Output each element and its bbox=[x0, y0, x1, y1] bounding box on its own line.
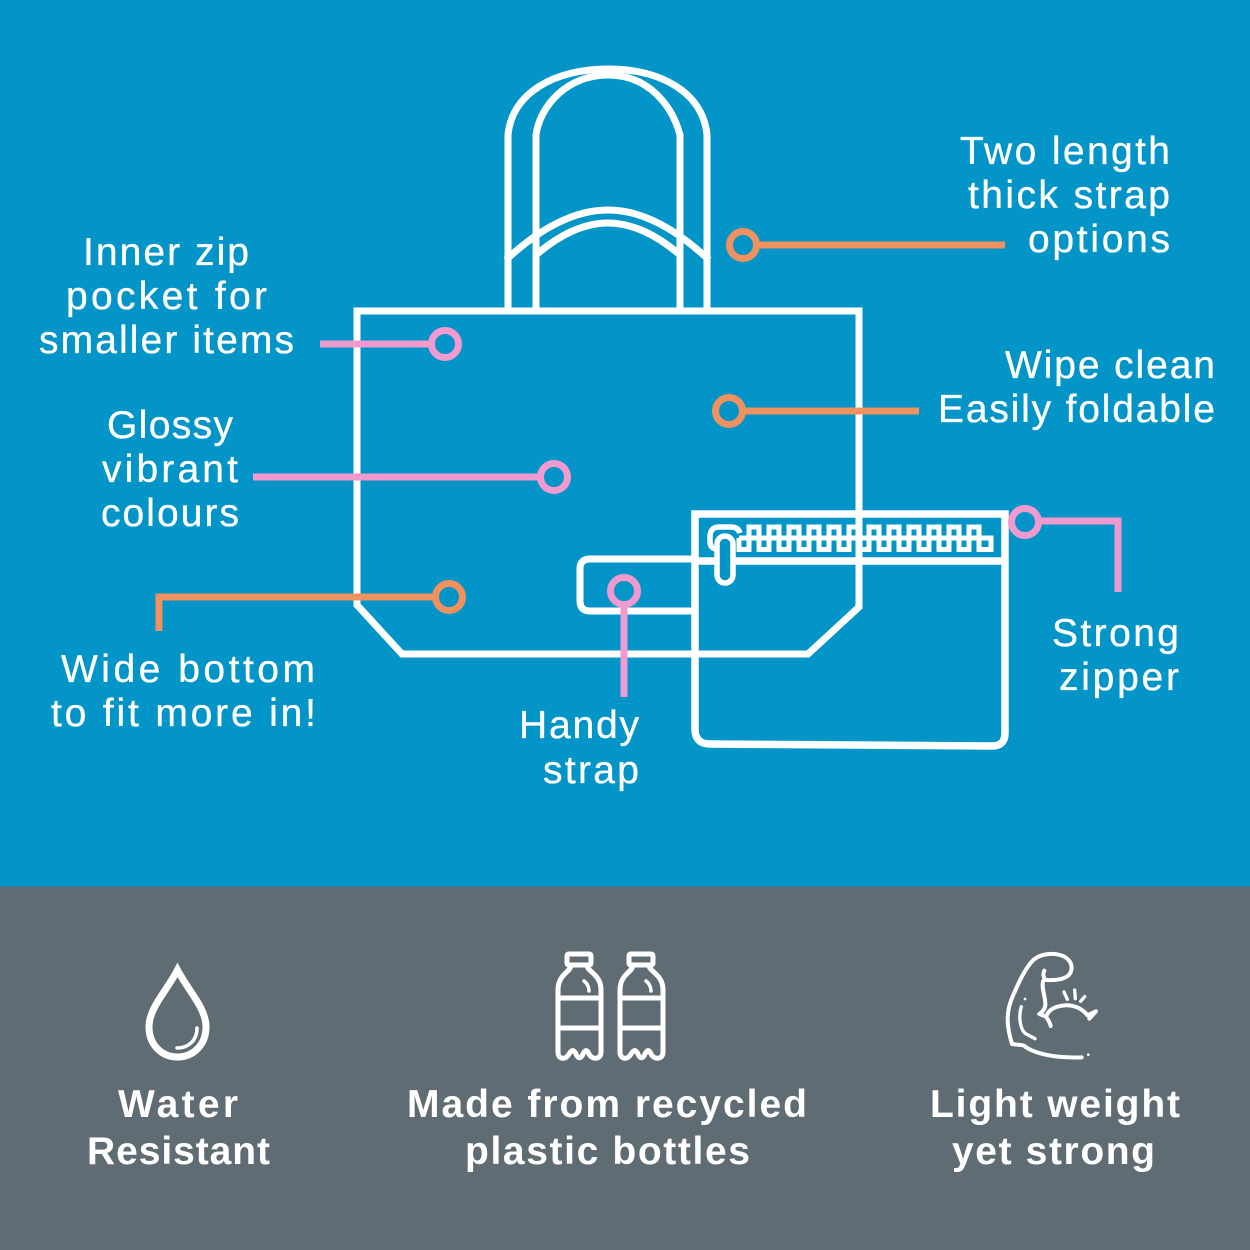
label: inner zip pocket: Inner zip bbox=[83, 231, 249, 274]
icon: water drop bbox=[149, 970, 206, 1057]
label: strong zipper bbox=[1052, 612, 1179, 699]
bag body bbox=[357, 311, 859, 654]
label: water resistant bbox=[87, 1083, 270, 1173]
label: wipe clean, easily foldable: Easily foldable bbox=[938, 388, 1215, 431]
label: two length thick strap options: Two length bbox=[960, 130, 1170, 173]
bottle one bbox=[558, 954, 601, 1058]
label: handy strap: strap bbox=[543, 749, 639, 792]
panel: blue bag diagram background bbox=[0, 0, 1250, 886]
label: two length thick strap options: thick strap bbox=[968, 174, 1170, 217]
label: inner zip pocket: smaller items bbox=[39, 319, 294, 362]
label: light weight yet strong: Light weight bbox=[930, 1083, 1180, 1126]
zip pouch bbox=[695, 514, 1005, 746]
label: strong zipper: zipper bbox=[1059, 656, 1179, 699]
label: light weight yet strong: yet strong bbox=[952, 1130, 1155, 1173]
label: glossy vibrant colours: Glossy bbox=[107, 404, 234, 447]
label: inner zip pocket bbox=[39, 231, 294, 362]
bottle two bbox=[620, 954, 663, 1058]
callout: inner zip pocket bbox=[320, 330, 458, 358]
label: glossy vibrant colours: vibrant bbox=[102, 448, 238, 491]
icon: two plastic bottles bbox=[558, 954, 663, 1058]
callout: wipe clean bbox=[716, 398, 919, 424]
label: two length thick strap options: options bbox=[1028, 218, 1170, 261]
label: wide bottom: to fit more in! bbox=[51, 692, 316, 735]
label: wide bottom bbox=[51, 648, 316, 735]
label: inner zip pocket: pocket for bbox=[66, 275, 267, 318]
label: two length thick strap options bbox=[960, 130, 1170, 261]
callout: strong zipper bbox=[1012, 508, 1118, 592]
callout: wide bottom bbox=[159, 584, 462, 631]
label: glossy vibrant colours bbox=[101, 404, 239, 535]
label: made from recycled plastic bottles bbox=[407, 1083, 807, 1173]
label: light weight yet strong bbox=[930, 1083, 1180, 1173]
label: wipe clean, easily foldable bbox=[938, 344, 1215, 431]
callout: two length strap bbox=[730, 232, 1005, 258]
callout: handy strap bbox=[610, 578, 638, 697]
label: wipe clean, easily foldable: Wipe clean bbox=[1005, 344, 1215, 387]
zipper pull bbox=[710, 527, 740, 583]
label: wide bottom: Wide bottom bbox=[61, 648, 315, 691]
panel: grey benefits background bbox=[0, 886, 1250, 1250]
label: water resistant: Resistant bbox=[87, 1130, 270, 1173]
zipper teeth bbox=[739, 527, 991, 550]
label: glossy vibrant colours: colours bbox=[101, 492, 239, 535]
illustration: tote bag bbox=[357, 69, 1005, 746]
label: water resistant: Water bbox=[118, 1083, 238, 1126]
icon: flexed arm bbox=[1008, 954, 1096, 1057]
handy strap loop bbox=[580, 559, 694, 611]
callout: glossy colours bbox=[253, 464, 568, 490]
label: made from recycled plastic bottles: Made from recycled bbox=[407, 1083, 807, 1126]
label: handy strap bbox=[519, 704, 640, 792]
bag handles bbox=[506, 69, 709, 311]
label: strong zipper: Strong bbox=[1052, 612, 1179, 655]
label: handy strap: Handy bbox=[519, 704, 640, 747]
label: made from recycled plastic bottles: plastic bottles bbox=[465, 1130, 750, 1173]
